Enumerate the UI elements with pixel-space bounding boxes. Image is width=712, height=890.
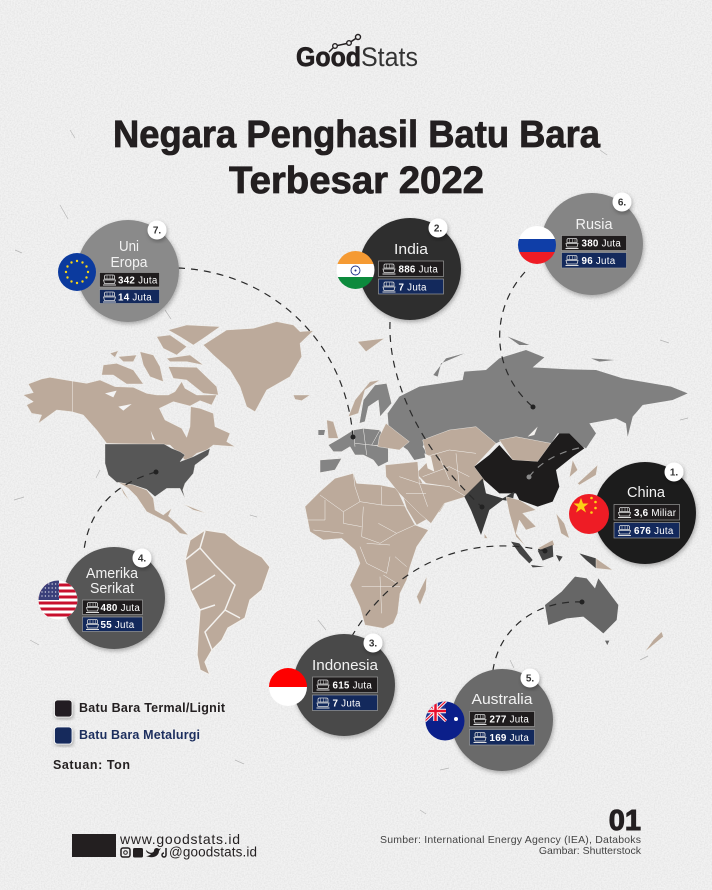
legend: thermal coal: Batu Bara Termal/Lignit xyxy=(79,701,226,715)
icon: USA flag xyxy=(38,580,78,620)
rank badge: 3. xyxy=(369,638,377,650)
map: Australia and New Zealand xyxy=(545,577,663,652)
logo: GoodStats: Stats xyxy=(361,42,418,72)
pill: thermal coal: 3,6 Miliar xyxy=(634,508,677,519)
rank badge: 1. xyxy=(670,468,678,478)
icon: Russia flag xyxy=(518,226,556,264)
pill: thermal coal: 342 Juta xyxy=(118,275,158,286)
legend: metallurgical coal: Batu Bara Metalurgi xyxy=(79,728,200,742)
pill: metallurgical coal: 55 Juta xyxy=(100,620,135,631)
title: Terbesar 2022 xyxy=(229,160,484,202)
map: Europe and Africa xyxy=(305,380,445,628)
legend: metallurgical coal xyxy=(54,727,200,744)
country name: India xyxy=(394,241,429,258)
footer: website and social xyxy=(72,831,257,860)
icon: Australia flag xyxy=(425,701,465,741)
source note: Sumber: International Energy Agency (IEA), Databoks xyxy=(380,834,641,846)
title: Negara Penghasil Batu Bara xyxy=(113,114,601,156)
country name xyxy=(86,565,139,597)
panel: Indonesia xyxy=(268,634,395,736)
icon: Indonesia flag xyxy=(268,667,308,707)
rank badge: 4. xyxy=(138,554,146,564)
pill: metallurgical coal: 14 Juta xyxy=(118,292,152,303)
panel: China xyxy=(569,462,696,564)
country name: Indonesia xyxy=(312,657,379,674)
panel: India xyxy=(335,218,461,320)
country name: China xyxy=(627,484,666,501)
map: North America xyxy=(23,322,313,535)
map: USA xyxy=(105,444,210,498)
pill: thermal coal: 480 Juta xyxy=(100,603,140,614)
title xyxy=(113,114,601,202)
icon: India flag xyxy=(336,251,374,289)
rank badge: 5. xyxy=(526,674,534,684)
map: South America xyxy=(185,530,270,675)
icons: social media xyxy=(121,848,166,858)
panel: Australia xyxy=(425,668,553,771)
icon: China flag xyxy=(569,494,609,534)
rank badge: 2. xyxy=(434,224,442,234)
page number: 01 xyxy=(609,805,641,837)
pill: metallurgical coal: 7 Juta xyxy=(332,698,361,709)
country name: Serikat xyxy=(90,580,135,597)
rank badge: 7. xyxy=(153,226,161,236)
country name: Rusia xyxy=(576,216,613,233)
world map xyxy=(23,322,688,675)
logo: GoodStats xyxy=(296,34,418,72)
country name: Eropa xyxy=(110,254,148,271)
panel: Rusia xyxy=(517,192,643,295)
icon: EU flag xyxy=(58,253,96,291)
country name: Uni xyxy=(119,238,139,255)
source note: Gambar: Shutterstock xyxy=(539,845,642,857)
panel: Amerika Serikat xyxy=(38,547,165,649)
pill: thermal coal: 380 Juta xyxy=(582,238,621,250)
country name: Amerika xyxy=(86,565,139,582)
logo: GoodStats: Good xyxy=(296,42,361,72)
unit note: Satuan: Ton xyxy=(53,758,130,772)
country name: Australia xyxy=(472,691,533,708)
pill: thermal coal: 886 Juta xyxy=(398,264,438,275)
panel: Uni Eropa xyxy=(58,220,179,322)
pill: thermal coal: 615 Juta xyxy=(332,680,372,691)
source note xyxy=(380,834,642,857)
footer: website and social: www.goodstats.id xyxy=(119,831,240,847)
country name xyxy=(110,238,148,271)
pill: metallurgical coal: 676 Juta xyxy=(634,526,674,537)
rank badge: 6. xyxy=(618,198,626,208)
dashed connector lines xyxy=(84,268,584,670)
pill: metallurgical coal: 7 Juta xyxy=(398,282,427,293)
legend xyxy=(53,700,226,772)
pill: metallurgical coal: 169 Juta xyxy=(490,733,529,744)
map: Russia and Asia xyxy=(358,337,688,570)
pill: metallurgical coal: 96 Juta xyxy=(582,256,616,267)
pill: thermal coal: 277 Juta xyxy=(490,714,529,726)
footer: website and social: @goodstats.id xyxy=(169,844,257,860)
